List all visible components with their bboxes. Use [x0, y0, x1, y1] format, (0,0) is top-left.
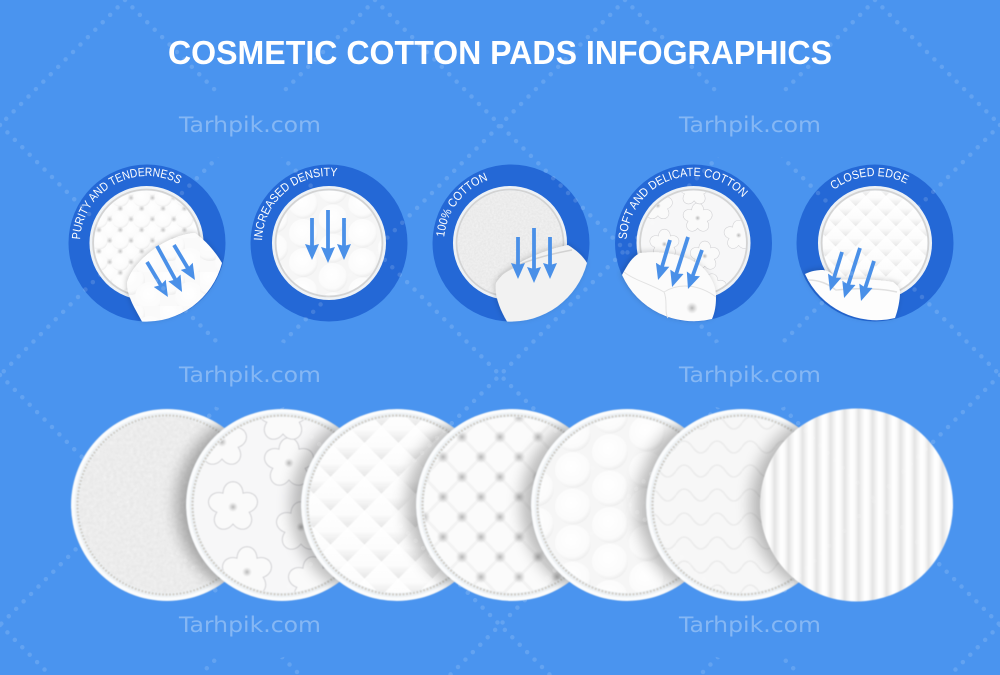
flap seam — [624, 272, 716, 318]
blue ring — [796, 164, 954, 322]
watermarks: Tarhpik.com — [178, 113, 321, 138]
flower pad — [636, 186, 750, 296]
blue ring — [615, 164, 772, 322]
watermarks: Tarhpik.com — [678, 613, 821, 638]
curved label: SOFT AND DELICATE COTTON — [618, 168, 748, 239]
peeled corner — [622, 252, 716, 321]
diamond quilted pad — [818, 186, 932, 300]
arrows — [833, 248, 874, 290]
blue ring — [432, 164, 590, 322]
felt pad — [453, 186, 567, 300]
curved label: INCREASED DENSITY — [254, 168, 338, 240]
pad: stripes — [760, 408, 953, 602]
arrows — [147, 245, 189, 288]
arrows — [661, 237, 702, 279]
title: COSMETIC COTTON PADS INFOGRAPHICS — [168, 34, 832, 71]
pad: diamond quilt — [300, 408, 455, 602]
feature badge: soft and delicate cotton — [615, 164, 772, 322]
curved label: CLOSED EDGE — [830, 168, 910, 188]
watermarks: Tarhpik.com — [178, 363, 321, 388]
curl shading — [808, 280, 897, 292]
fold line — [498, 250, 572, 277]
pad: flowers — [186, 408, 340, 602]
peeled corner — [496, 245, 587, 322]
quilted pad — [89, 186, 204, 300]
pad: tufted — [416, 408, 570, 602]
peeled corner — [127, 233, 222, 322]
row of seven cotton pads — [71, 392, 953, 604]
blue ring — [68, 164, 226, 322]
curved label: 100% COTTON — [436, 172, 488, 236]
flap dot — [686, 302, 698, 314]
pad: felt — [70, 408, 225, 602]
watermarks — [178, 113, 821, 638]
bubble pad — [272, 186, 386, 300]
pad: waves — [646, 408, 800, 602]
feature badge: 100% cotton — [432, 164, 590, 323]
arrows — [312, 210, 344, 252]
pad: bubbles — [530, 408, 685, 602]
peeled corner — [805, 270, 900, 320]
blue ring — [250, 164, 408, 322]
feature badge: purity and tenderness — [68, 164, 226, 323]
feature badge: increased density — [250, 164, 408, 322]
arrows — [518, 228, 550, 272]
watermarks: Tarhpik.com — [678, 113, 821, 138]
watermarks: Tarhpik.com — [678, 363, 821, 388]
feature badge: closed edge — [796, 164, 954, 322]
curved label: PURITY AND TENDERNESS — [72, 168, 182, 239]
watermarks: Tarhpik.com — [178, 613, 321, 638]
